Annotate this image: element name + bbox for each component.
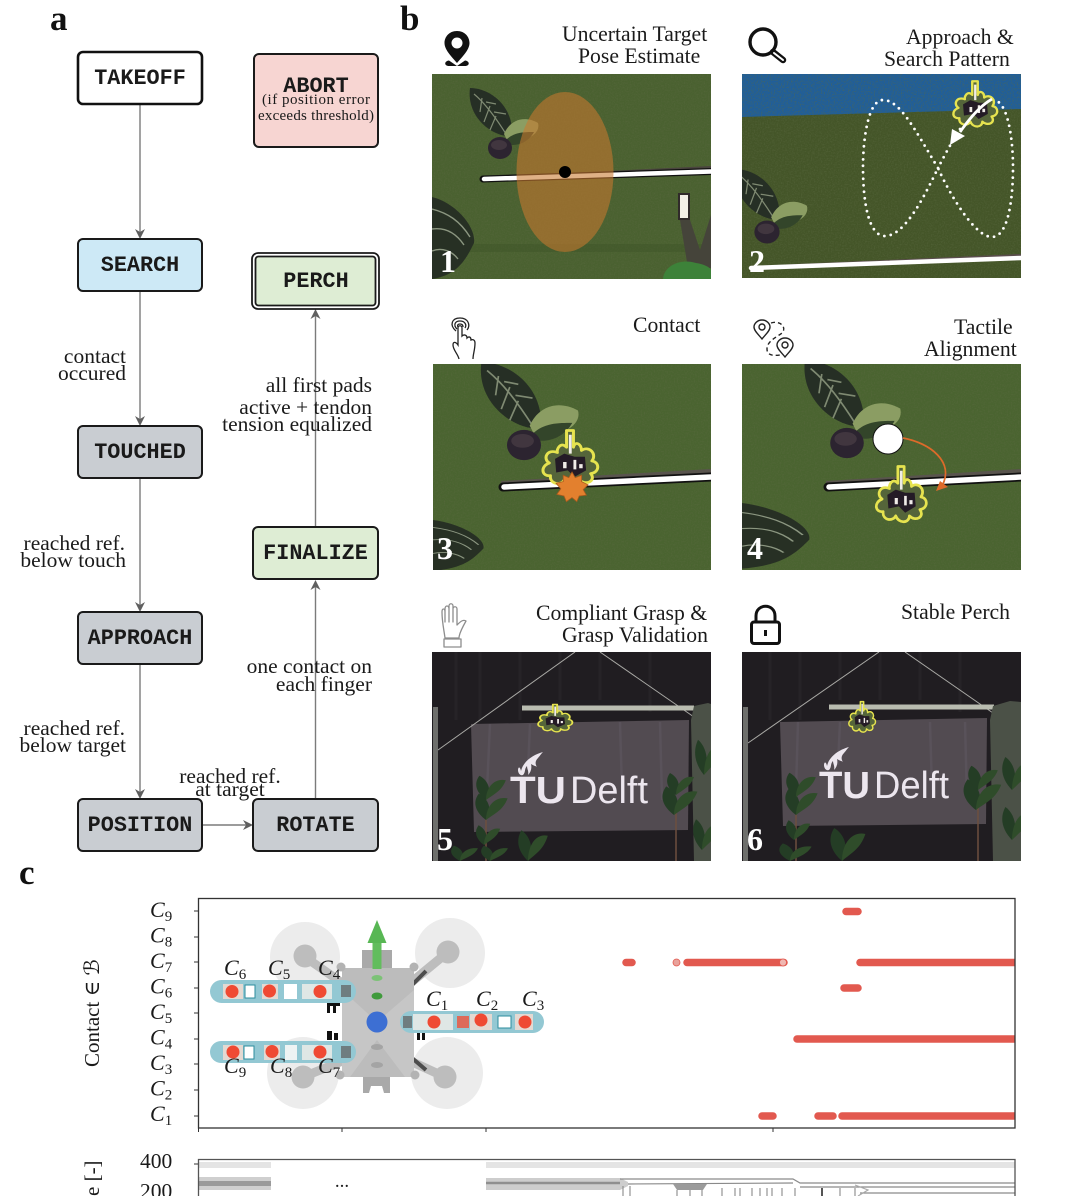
axis break marker: ... [335,1171,349,1192]
logo: TU Delft [510,752,648,812]
icon: route pins [754,320,793,357]
label: one contact on each finger: one contact on [247,654,372,678]
state: takeoff: TAKEOFF [94,66,186,91]
sensor labels: C [522,986,537,1011]
title: Tactile [954,315,1013,339]
state: approach: APPROACH [88,626,192,651]
title: Grasp Validation [562,623,708,647]
step number 6: 6 [747,821,763,857]
y axis values: 400 [140,1149,172,1173]
sensor labels: C [224,955,239,980]
sensor labels: 6 [239,967,247,983]
step number 5: 5 [437,821,453,857]
label: below target: below target [20,733,126,757]
y axis labels: 1 [165,1113,172,1129]
label: contact occured: contact [64,344,126,368]
arrow: finalize to perch [310,309,320,527]
state: rotate: ROTATE [276,813,355,838]
y axis labels: C [150,1076,165,1100]
axis tick [194,1163,198,1165]
state: perch: PERCH [283,269,349,294]
contact event bars [626,912,1030,1116]
label: below target: reached ref. [24,716,125,740]
state: rotate [253,799,378,851]
label: pads active and tendon equalized: all first pads [266,373,372,397]
step number 3: 3 [437,530,453,566]
plot frame [198,1160,1015,1196]
sensor labels [224,955,544,1081]
sensor labels: 9 [239,1065,246,1081]
state: search [78,239,202,291]
y axis labels: C [150,922,165,948]
y axis labels: 7 [165,960,173,976]
state: position [78,799,202,851]
label: at target [179,764,281,801]
state: abort: exceeds threshold) [258,108,374,124]
y axis labels: 3 [165,1062,172,1078]
y axis labels: C [150,1101,165,1126]
title: Approach & [906,25,1014,49]
arrow: touched to approach [135,478,145,612]
state: perch [252,253,379,309]
icon: magnifier [750,29,783,60]
y axis labels: 5 [165,1011,172,1027]
label: pads active and tendon equalized [222,373,372,436]
sensor labels: C [270,1053,285,1078]
axis ticks [194,911,773,1132]
sensor labels: C [318,955,333,980]
y axis labels: C [150,897,165,922]
title [562,22,707,68]
arrow: rotate to finalize [310,580,320,799]
state: finalize: FINALIZE [263,541,368,566]
step number 1: 1 [440,243,456,279]
title [536,601,708,647]
sensor labels: 1 [441,998,448,1014]
label: at target: reached ref. [179,764,281,788]
label: one contact on each finger: each finger [276,672,372,696]
label: below target [20,716,126,757]
title: Contact [633,313,700,337]
plot frame [198,898,1015,1128]
y axis labels: C [150,948,165,973]
title [924,315,1017,361]
state: position: POSITION [88,813,192,838]
step 2: approach and search pattern [735,25,1021,279]
y axis labels: C [150,999,165,1024]
state: touched [78,426,202,478]
logo: TU Delft: Delft [874,765,949,807]
arrow: position to rotate [202,820,253,830]
label: contact occured [58,344,126,385]
title: Stable Perch [901,600,1010,624]
y axis labels: 8 [165,934,172,950]
icon: open hand [442,604,466,647]
step 4: tactile alignment [742,315,1021,570]
sensor labels: 8 [285,1065,292,1081]
heading: panel c: c [19,853,35,892]
title: Compliant Grasp & [536,601,707,625]
rotors [267,918,485,1109]
label: contact occured: occured [58,361,126,385]
sensor labels: C [224,1053,239,1078]
y axis labels: 4 [165,1036,173,1052]
finger: upper left [210,980,356,1003]
arrow: approach to position [135,664,145,799]
y axis labels: 9 [165,909,172,925]
y axis labels: 2 [165,1088,172,1104]
y axis labels [150,897,173,1129]
state: finalize [253,527,378,579]
title: Search Pattern [884,47,1010,71]
y axis labels: 6 [165,986,173,1002]
sensor labels: 3 [537,998,544,1014]
photo 1 [432,74,711,279]
logo: TU Delft: TU [819,765,870,807]
label: below touch: below touch [20,548,126,572]
centre of mass [366,1012,388,1032]
state: takeoff [78,52,202,104]
state: touched: TOUCHED [94,440,186,465]
step 1: uncertain target pose estimate [432,22,711,279]
title [884,25,1014,71]
label: below touch: reached ref. [24,531,125,555]
icon: padlock [752,606,780,644]
sensor labels: 4 [333,967,341,983]
y axis labels: C [150,1050,165,1075]
step 5: compliant grasp and validation [432,601,722,861]
label: pads active and tendon equalized: tension equalized [222,412,372,436]
title: Pose Estimate [578,44,700,68]
body [336,950,420,1093]
state: abort: (if position error [262,92,370,108]
icon: map pin [444,31,470,66]
title: Uncertain Target [562,22,707,46]
drone diagram [210,918,544,1109]
step 6: stable perch [742,600,1032,861]
label: below touch [20,531,126,572]
y axis title: Contact ∈ ℬ [80,959,104,1067]
traces [198,1162,1015,1196]
y axis labels: C [150,974,165,998]
step number 2: 2 [749,243,765,279]
y axis labels: C [150,1024,165,1050]
arrow: takeoff to search [135,104,145,239]
state: abort [254,54,378,147]
logo: TU Delft: Delft [570,770,648,812]
photo 3 [433,364,711,570]
chart: lower time series [84,1154,1016,1196]
y axis title: e [-] [80,1160,104,1196]
logo: TU Delft [819,747,949,807]
sensor labels: 2 [491,998,498,1014]
finger: right [400,1011,544,1033]
logo: TU Delft: TU [510,770,566,812]
state: abort: ABORT [283,74,349,99]
heading: panel a: a [50,0,68,38]
finger: lower left [210,1041,356,1063]
photo 6 [742,652,1021,861]
photo 4 [742,364,1021,570]
step 3: contact [433,313,711,571]
heading arrow [368,920,386,1000]
sensor labels: C [318,1053,333,1078]
sensor labels: C [426,986,441,1011]
sensor labels: 7 [333,1065,341,1081]
y axis values [140,1149,172,1196]
arrow: search to touched [135,291,145,426]
sensor labels: 5 [283,967,290,983]
sensor labels: C [476,986,491,1011]
icon: touch hand [452,318,475,359]
photo 5 [432,652,711,861]
state: search: SEARCH [101,253,179,278]
mechanism details [327,1003,425,1040]
sensor labels: C [268,955,283,980]
label: pads active and tendon equalized: active + tendon [239,395,372,419]
heading: panel b: b [400,0,419,38]
chart: contact timeline [80,897,1030,1132]
title: Alignment [924,337,1017,361]
photo 2 [742,74,1021,278]
label: one contact on each finger [247,654,372,696]
panel: state machine [20,52,379,851]
label: at target: at target [195,777,265,801]
step number 4: 4 [747,530,763,566]
state: approach [78,612,202,664]
